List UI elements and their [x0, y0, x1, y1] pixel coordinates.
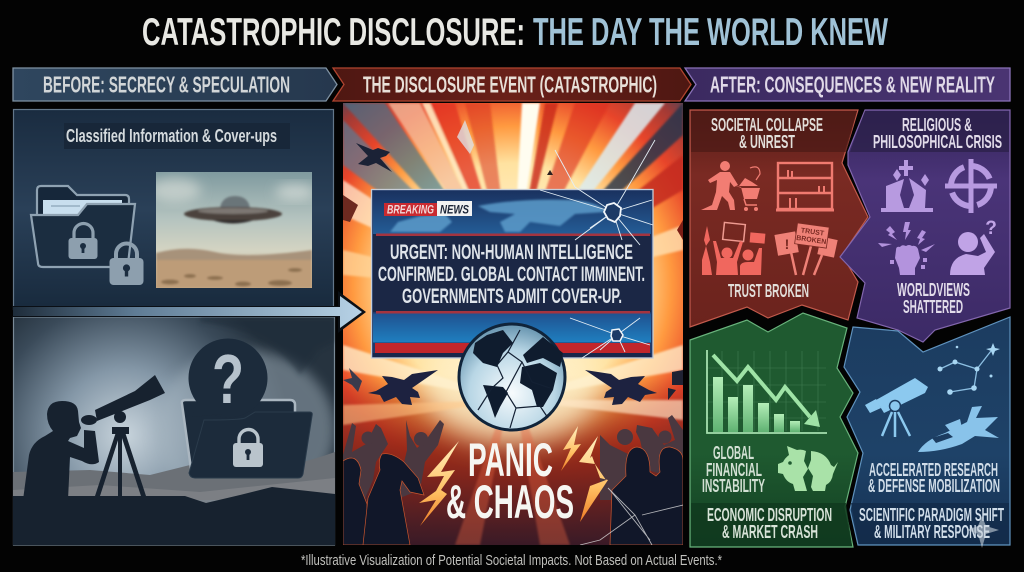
icon: top-left fighter jet — [356, 143, 392, 172]
panel: disclosure event — [343, 103, 683, 545]
crowd silhouettes — [343, 415, 683, 545]
heading — [859, 505, 1004, 542]
header: disclosure event: THE DISCLOSURE EVENT (CATASTROPHIC) — [363, 72, 657, 98]
debris shards — [343, 120, 683, 400]
news screen — [372, 190, 653, 358]
icon: confused person: ? — [985, 218, 997, 239]
icon: broken piggy bank — [778, 446, 838, 491]
crack lines, lower right — [580, 488, 683, 545]
icon: empty shelves — [776, 163, 834, 210]
photo: blurred flying saucer over desert — [149, 172, 315, 288]
heading — [707, 505, 832, 542]
icon: cracked church — [881, 160, 933, 212]
panic and chaos label: PANIC — [468, 433, 553, 486]
icon: protesters — [702, 222, 765, 275]
heading — [711, 115, 823, 152]
panel: scientific shift — [844, 317, 1010, 548]
icon: telescope on tripod — [81, 375, 165, 496]
header: before — [13, 68, 337, 101]
title: CATASTROPHIC DISCLOSURE: — [142, 11, 525, 54]
panel heading — [64, 123, 290, 149]
heading: & UNREST — [739, 132, 795, 152]
panel: religious crisis — [840, 110, 1010, 342]
icon: raised fist with sparks — [878, 222, 935, 275]
heading — [873, 115, 1002, 152]
icon: constellation — [938, 343, 1000, 395]
breaking news tag: NEWS — [440, 202, 469, 216]
icon: small far jet — [343, 368, 362, 392]
breaking news tag — [384, 201, 472, 216]
panic and chaos label: & CHAOS — [446, 475, 574, 528]
lower rays — [343, 345, 683, 545]
icon: locked folder with question bubble — [182, 338, 312, 478]
heading: & MARKET CRASH — [722, 522, 818, 542]
icon: lightning bolts — [419, 426, 608, 526]
icon: protest signs: ! — [785, 236, 789, 252]
panel: speculation scene — [13, 317, 335, 545]
breaking news tag: BREAKING — [387, 202, 434, 216]
icon: confused person — [950, 218, 997, 275]
icon: left fighter jet — [368, 370, 438, 405]
text: global financial instability — [702, 443, 765, 496]
header: disclosure event — [333, 68, 691, 101]
icon: large padlock — [110, 244, 144, 285]
text: accelerated research — [868, 460, 1000, 496]
shattered glass impacts — [540, 140, 655, 358]
arrow: before to disclosure — [13, 291, 366, 333]
icon: small padlock — [68, 224, 98, 259]
icon: spacecraft — [918, 406, 999, 452]
world map, top band — [373, 191, 651, 234]
headline band: URGENT: NON-HUMAN INTELLIGENCE — [390, 241, 633, 264]
icon: sparkle watermark — [967, 516, 999, 548]
sunburst rays — [343, 103, 683, 290]
icon: broken cross in ring — [945, 159, 997, 213]
distant hills — [13, 452, 335, 500]
icon: protest signs — [774, 223, 838, 275]
panel: classified information — [14, 110, 334, 310]
caption: TRUST BROKEN — [728, 281, 809, 301]
bottom corner shade — [365, 472, 658, 502]
heading: ECONOMIC DISRUPTION — [707, 505, 832, 525]
icon: telescope — [865, 378, 928, 437]
text: global financial instability: GLOBAL — [713, 443, 754, 463]
text: global financial instability: FINANCIAL — [706, 460, 762, 480]
glow behind globe — [424, 327, 600, 443]
lower band — [373, 314, 651, 342]
caption: WORLDVIEWS — [897, 280, 970, 300]
bar chart with falling arrow — [707, 350, 827, 433]
header: before: BEFORE: SECRECY & SPECULATION — [43, 72, 290, 98]
icon: padlock — [233, 430, 263, 467]
headline band — [373, 234, 651, 314]
panel: economic disruption — [690, 313, 858, 547]
panel heading: Classified Information & Cover-ups — [66, 126, 277, 146]
text: global financial instability: INSTABILITY — [702, 476, 765, 496]
caption: SHATTERED — [903, 297, 963, 317]
icon: locked folder with question bubble: ? — [212, 340, 244, 418]
icon: locked folder — [31, 186, 144, 285]
icon: right fighter jet — [585, 370, 657, 405]
icon: protest signs: BROKEN — [796, 235, 827, 246]
caption — [897, 280, 970, 317]
foreground ground — [13, 487, 335, 545]
panel: societal collapse — [690, 110, 868, 327]
silhouette: observer — [23, 401, 99, 500]
icon: protest signs: TRUST — [800, 227, 825, 238]
footnote: *Illustrative Visualization of Potential Societal Impacts. Not Based on Actual Events.* — [301, 553, 722, 569]
panic and chaos label — [447, 443, 573, 518]
headline band: GOVERNMENTS ADMIT COVER-UP. — [402, 285, 622, 308]
headline band: CONFIRMED. GLOBAL CONTACT IMMINENT. — [378, 263, 645, 286]
icon: looter with cart — [701, 161, 760, 211]
heading: RELIGIOUS & — [902, 115, 972, 135]
heading: SOCIETAL COLLAPSE — [711, 115, 823, 135]
icon: cracked globe — [459, 324, 565, 430]
